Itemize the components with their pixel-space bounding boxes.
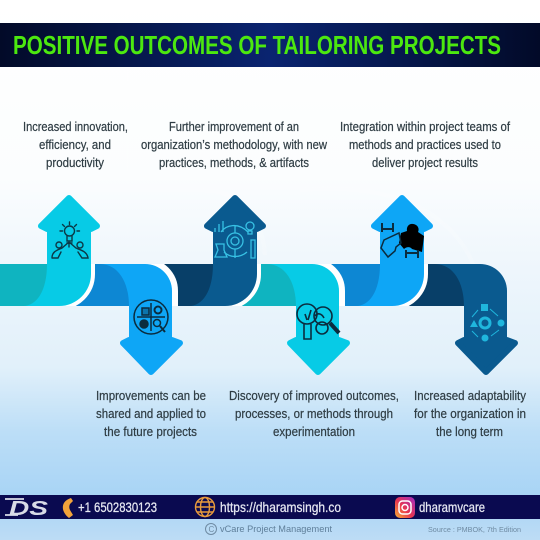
text block: further improvement: organization’s methodology, with new — [141, 137, 328, 152]
icon: globe — [196, 498, 214, 516]
text block: adaptability: for the organization in — [414, 406, 526, 421]
copyright: C — [208, 525, 214, 534]
text block: further improvement — [141, 119, 328, 170]
text block: improvements: Improvements can be — [96, 388, 206, 403]
arrow 5: up blue — [356, 198, 430, 306]
icon: phone — [63, 498, 73, 518]
text block: adaptability: Increased adaptability — [414, 388, 526, 403]
arrow 3: up navy — [189, 198, 263, 306]
icon: puzzle pieces — [381, 223, 424, 258]
footer band — [0, 495, 540, 520]
text block: increased innovation — [23, 119, 128, 170]
icon: methodology wheel — [215, 221, 255, 258]
text block: discovery: experimentation — [273, 424, 355, 439]
website: https://dharamsingh.co — [220, 499, 341, 515]
text block: integration: deliver project results — [372, 155, 478, 170]
arrow 4: down cyan — [267, 264, 347, 372]
phone number: +1 6502830123 — [78, 499, 157, 515]
icon: lightbulb and people — [52, 222, 88, 258]
logo — [5, 498, 49, 520]
arrow 6: down navy — [435, 264, 515, 372]
text block: integration — [340, 119, 510, 170]
text block: adaptability — [414, 388, 526, 439]
band segments — [0, 264, 467, 306]
text block: increased innovation: Increased innovation, — [23, 119, 128, 134]
copyright: vCare Project Management — [220, 524, 332, 535]
text block: improvements: the future projects — [104, 424, 197, 439]
instagram handle: dharamvcare — [419, 499, 485, 515]
icon: instagram — [395, 497, 415, 518]
text block: increased innovation: productivity — [46, 155, 104, 170]
arrow 2: down blue — [100, 264, 180, 372]
icon: bulb and magnifier — [297, 304, 339, 339]
text block: further improvement: Further improvement of an — [169, 119, 299, 134]
title band — [0, 23, 540, 67]
arrow 1: up cyan — [23, 198, 97, 306]
text block: discovery — [229, 388, 399, 439]
source: Source : PMBOK, 7th Edition — [428, 525, 521, 534]
text block: integration: Integration within project teams of — [340, 119, 510, 134]
text block: improvements — [96, 388, 206, 439]
logo: DS — [9, 498, 49, 520]
text block: discovery: Discovery of improved outcomes, — [229, 388, 399, 403]
text block: integration: methods and practices used to — [349, 137, 501, 152]
icon: cycle of four tools — [134, 300, 168, 334]
icon: adaptive cycle — [470, 304, 504, 342]
text block: improvements: shared and applied to — [96, 406, 206, 421]
text block: further improvement: practices, methods, & artifacts — [159, 155, 309, 170]
watermark pattern — [20, 170, 505, 290]
text block: discovery: processes, or methods through — [235, 406, 393, 421]
text block: adaptability: the long term — [436, 424, 503, 439]
text block: increased innovation: efficiency, and — [39, 137, 111, 152]
